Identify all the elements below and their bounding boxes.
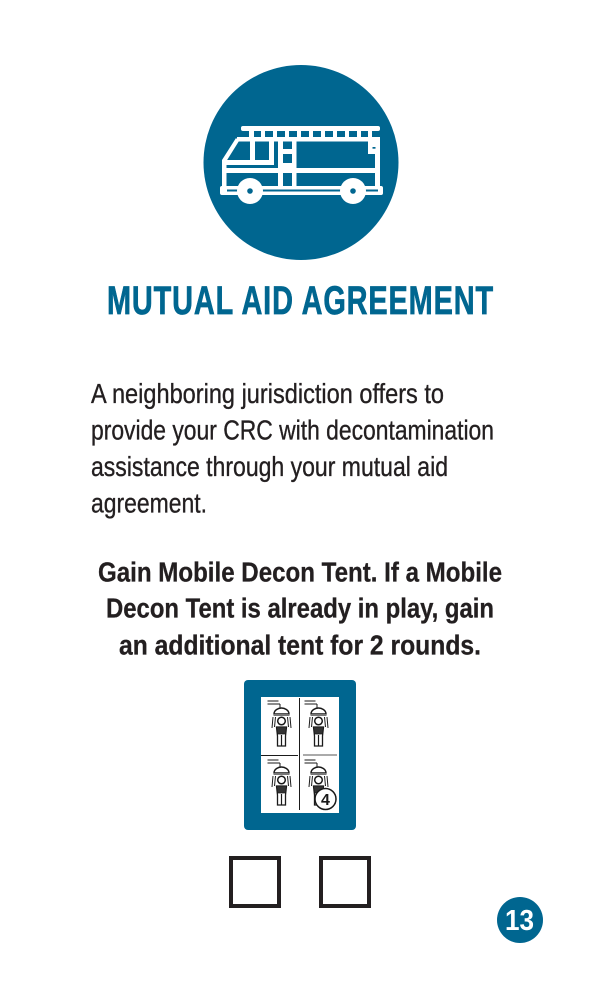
badge: 4: 4 [321, 792, 330, 809]
body text: agreement. [91, 488, 207, 518]
ladder [237, 126, 380, 142]
bold instruction text: Decon Tent is already in play, gain [106, 592, 494, 624]
body text [91, 378, 494, 518]
page number badge: 13 [505, 905, 534, 937]
body text: provide your CRC with decontamination [91, 414, 494, 446]
mobile decon tent card [244, 680, 356, 830]
badge: 4 [315, 788, 336, 810]
shower figures [268, 701, 328, 805]
checkbox 1 [231, 858, 279, 906]
checkbox 2 [321, 858, 369, 906]
body text: A neighboring jurisdiction offers to [91, 378, 444, 409]
icon: fire truck in circle [204, 65, 398, 260]
truck body [222, 138, 380, 187]
page number badge [497, 897, 543, 943]
wheels [237, 178, 366, 204]
bold instruction text [98, 556, 502, 660]
body text: assistance through your mutual aid [91, 451, 448, 482]
chassis [220, 186, 383, 195]
bold instruction text: an additional tent for 2 rounds. [119, 630, 481, 660]
bold instruction text: Gain Mobile Decon Tent. If a Mobile [98, 556, 502, 588]
